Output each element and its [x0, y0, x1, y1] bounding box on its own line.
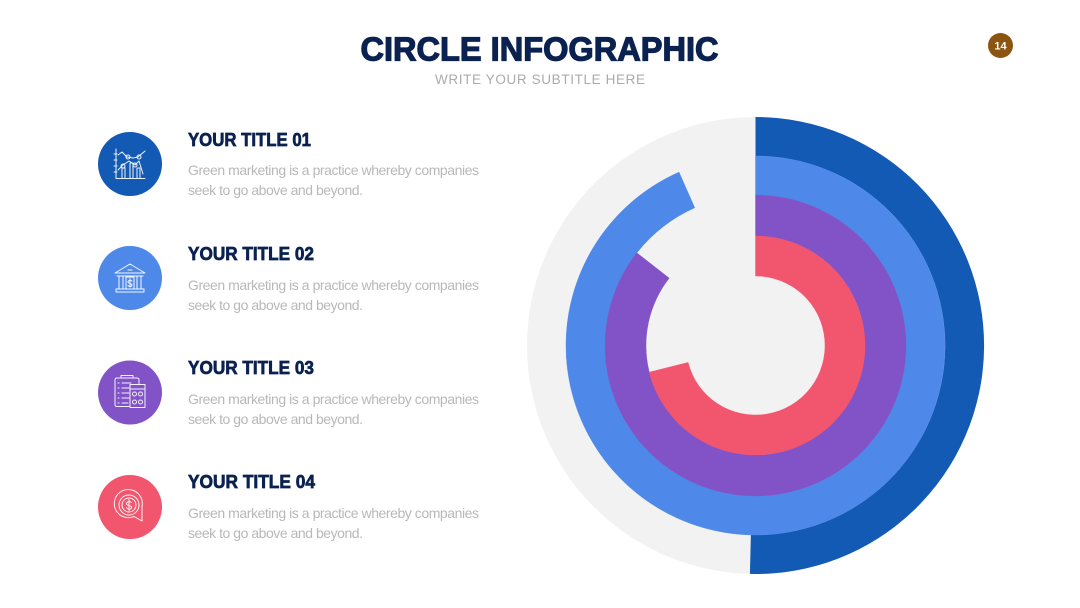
ring: purple: [605, 195, 906, 496]
icon: dollar speech bubble: [98, 475, 162, 539]
text block: Green marketing is a practice whereby companies: [188, 162, 479, 178]
text block: [188, 391, 479, 427]
text block: Green marketing is a practice whereby companies: [188, 505, 479, 521]
ring: dark blue: [750, 117, 984, 574]
ring: red: [649, 236, 865, 455]
text block: seek to go above and beyond.: [188, 411, 363, 427]
item 3: [98, 358, 479, 427]
text block: [188, 162, 479, 198]
item 1: [98, 130, 479, 198]
text block: Green marketing is a practice whereby companies: [188, 391, 479, 407]
text block: seek to go above and beyond.: [188, 297, 363, 313]
heading: YOUR TITLE 03: [188, 358, 314, 378]
icon: line and bar chart: [98, 132, 162, 196]
item 2: [98, 244, 479, 313]
ring: blue: [566, 156, 945, 535]
heading: YOUR TITLE 02: [188, 244, 314, 264]
icon: bank: [98, 246, 162, 310]
text block: [188, 505, 479, 541]
text block: seek to go above and beyond.: [188, 182, 363, 198]
item 4: [98, 472, 479, 541]
heading: YOUR TITLE 04: [188, 472, 315, 492]
icon: clipboard and calculator: [98, 360, 162, 424]
background disc: [527, 117, 984, 574]
title: CIRCLE INFOGRAPHIC: [360, 30, 718, 68]
page number badge: 14: [994, 40, 1007, 52]
chart: concentric radial progress rings: [527, 117, 984, 574]
text block: [188, 277, 479, 313]
text block: seek to go above and beyond.: [188, 525, 363, 541]
heading: YOUR TITLE 01: [188, 130, 311, 150]
page number badge: [988, 33, 1013, 58]
subtitle: WRITE YOUR SUBTITLE HERE: [435, 72, 645, 87]
text block: Green marketing is a practice whereby companies: [188, 277, 479, 293]
